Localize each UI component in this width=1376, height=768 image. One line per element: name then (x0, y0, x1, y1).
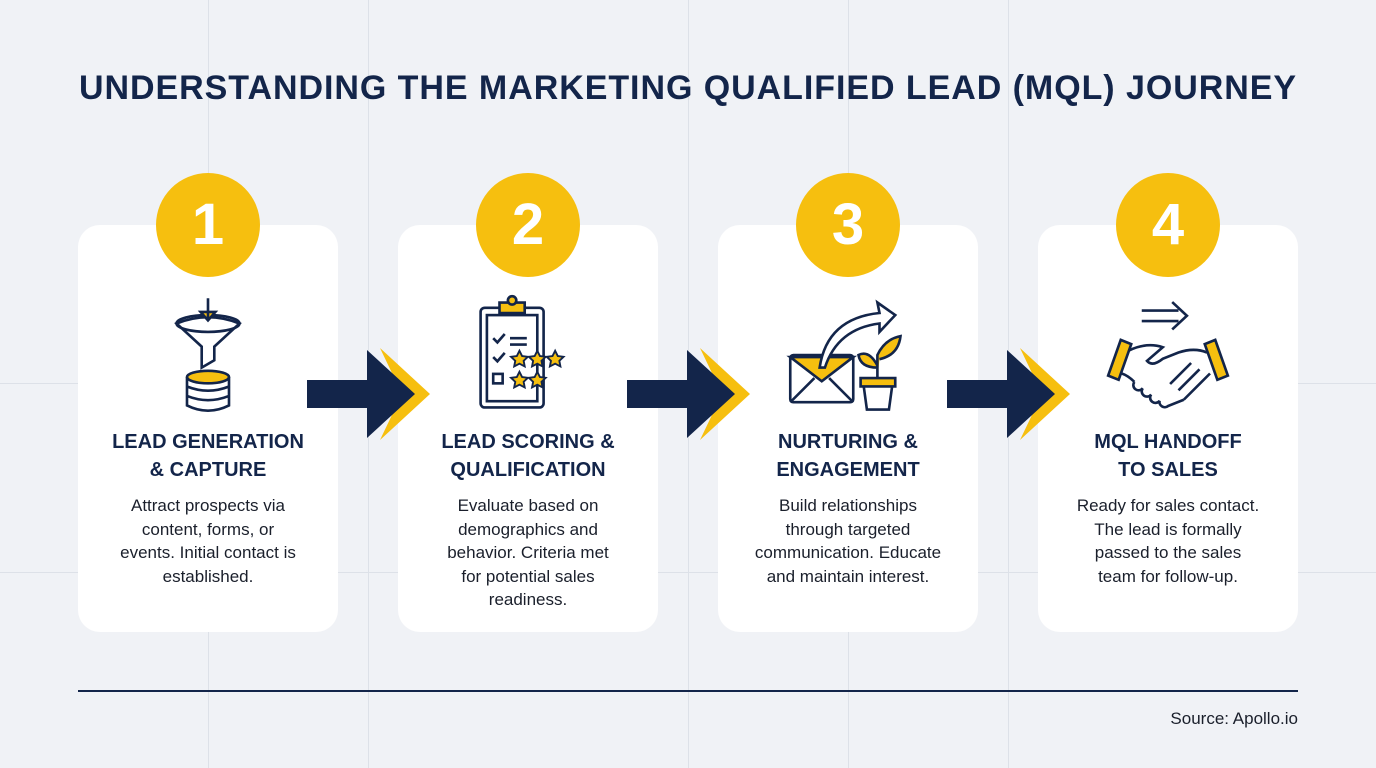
heading 2 (441, 431, 615, 481)
text 2 (447, 496, 609, 609)
text 3 (755, 496, 941, 586)
heading 4: TO SALES (1118, 459, 1218, 481)
card 3 (718, 225, 978, 632)
arrow 1 (307, 348, 430, 440)
card 2 (398, 225, 658, 632)
text 2: Evaluate based on (458, 496, 598, 515)
heading 3: ENGAGEMENT (776, 459, 920, 481)
text 4 (1077, 496, 1259, 586)
arrow 3 (947, 348, 1070, 440)
text 4: Ready for sales contact. (1077, 496, 1259, 515)
text 1 (120, 496, 296, 586)
text 1: content, forms, or (142, 520, 274, 538)
number 1: 1 (192, 192, 224, 257)
icon: clipboard with stars (479, 294, 566, 409)
icon: envelope and plant (786, 300, 902, 411)
title: UNDERSTANDING THE MARKETING QUALIFIED LEAD (MQL) JOURNEY (79, 69, 1297, 107)
text 2: demographics and (458, 520, 598, 538)
text 1: established. (163, 566, 253, 586)
number 3: 3 (832, 192, 864, 257)
icon: handshake (1106, 301, 1230, 408)
heading 4 (1094, 431, 1242, 481)
number 4: 4 (1152, 192, 1184, 257)
number 1 (156, 173, 260, 277)
arrow 2 (627, 348, 750, 440)
text 3: Build relationships (779, 496, 917, 515)
heading 1 (112, 431, 304, 481)
number 4 (1116, 173, 1220, 277)
number 3 (796, 173, 900, 277)
text 2: behavior. Criteria met (447, 543, 609, 562)
text 3: through targeted (786, 520, 910, 538)
heading 2: LEAD SCORING & (441, 431, 615, 453)
text 2: for potential sales (461, 566, 595, 586)
text 4: The lead is formally (1094, 520, 1242, 538)
text 4: team for follow-up. (1098, 566, 1238, 586)
number 2: 2 (512, 192, 544, 257)
text 1: events. Initial contact is (120, 543, 296, 562)
text 1: Attract prospects via (131, 496, 285, 515)
heading 2: QUALIFICATION (450, 459, 606, 481)
text 4: passed to the sales (1095, 543, 1241, 562)
source: Source: Apollo.io (1170, 709, 1298, 728)
number 2 (476, 173, 580, 277)
text 2: readiness. (489, 590, 567, 609)
card 4 (1038, 225, 1298, 632)
text 3: communication. Educate (755, 543, 941, 562)
heading 1: & CAPTURE (150, 459, 266, 481)
heading 1: LEAD GENERATION (112, 431, 304, 453)
heading 3 (776, 431, 920, 481)
icon: funnel and database (174, 298, 242, 412)
text 3: and maintain interest. (767, 566, 929, 586)
heading 3: NURTURING & (778, 431, 918, 453)
heading 4: MQL HANDOFF (1094, 431, 1242, 453)
card 1 (78, 225, 338, 632)
